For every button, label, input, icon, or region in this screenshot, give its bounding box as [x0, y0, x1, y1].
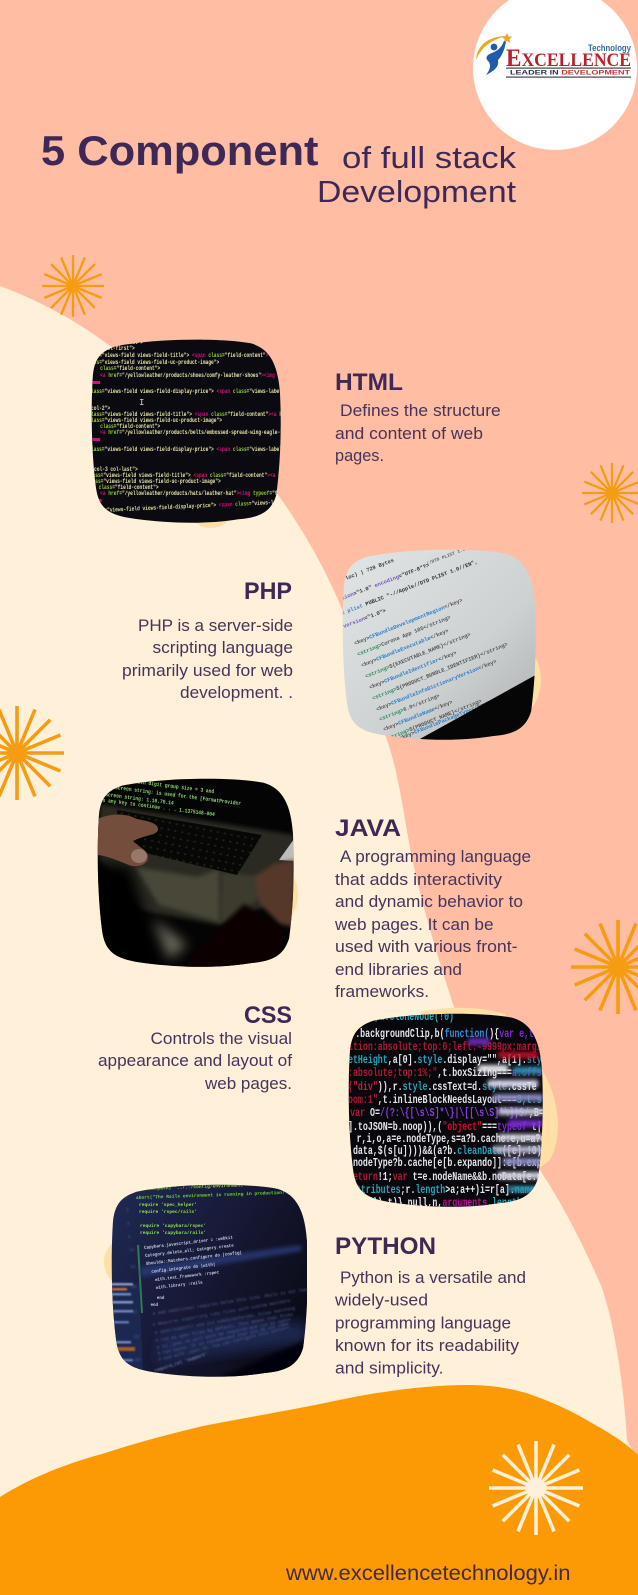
- panel: python photo: 9: [128, 1235, 131, 1240]
- text: html description: [335, 401, 501, 465]
- panel: php photo: <key>CFBundleDevelopmentRegion</key>: [354, 598, 464, 647]
- panel: php photo: <string>6.0</string>: [379, 693, 441, 723]
- panel: php photo: <key>CFBundleInfoDictionaryVersion</key>: [376, 659, 498, 713]
- panel: css photo: oom:1",t.inlineBlockNeedsLayout===3,t.s: [348, 1094, 542, 1108]
- panel: python photo: 28: [135, 1358, 141, 1363]
- text: python description: and simplicity.: [335, 1358, 444, 1378]
- panel: php photo: <string>${PRODUCT_NAME}</string>: [385, 699, 483, 743]
- panel: python photo: Category.delete_all; Category.create: [145, 1243, 234, 1259]
- panel: php photo: <string>Corona App 105</string>: [357, 615, 452, 658]
- panel: php photo: version="1.0">: [343, 608, 387, 630]
- text: php description: primarily used for web: [122, 661, 293, 680]
- panel: python photo: end: [151, 1303, 158, 1308]
- panel: python photo: 25: [134, 1335, 140, 1340]
- panel: python photo: require 'capybara/rspec': [140, 1223, 206, 1229]
- left hand: [97, 814, 158, 866]
- panel: css photo: :absolute;top:1%;",t.boxSizing===a.offsetW: [348, 1067, 557, 1081]
- panel: css photo: .backgroundClip,b(function(){var e,t,n: [355, 1028, 544, 1042]
- heading: css: CSS: [244, 1002, 292, 1029]
- panel: html photo: lass="views-field views-field-display-price"> <span class="views-label views-label": [91, 388, 317, 395]
- panel: java photo: ...with digit group size = 3 and: [126, 778, 214, 795]
- right hand and sleeve: [254, 860, 294, 927]
- panel: python photo: 12: [129, 1248, 135, 1253]
- text: java description: that adds interactivity: [335, 870, 503, 889]
- panel: python photo: # Requires supporting ruby files with custom matchers: [152, 1299, 291, 1328]
- panel: html photo: col-3 col-last">: [94, 466, 138, 473]
- panel: html photo: lass="views-field views-field-title"> <span class="field-content"><a href-field: [91, 411, 307, 418]
- wordmark: EXCELLENCE: [506, 45, 631, 72]
- panel: php photo: <string>${EXECUTABLE_NAME}</string>: [365, 632, 472, 680]
- panel: css photo: etHeight,a[0].style.display="",a[1].style.dis: [348, 1054, 572, 1068]
- panel: python photo: 18: [131, 1285, 137, 1290]
- text: python description: Python is a versatile and: [340, 1268, 526, 1287]
- icon: swoosh and figure: [476, 33, 512, 75]
- panel: html photo: lass="views-field views-field-display-price"> <span class="views-label views-label": [91, 446, 317, 453]
- text: css description: appearance and layout of: [98, 1051, 292, 1070]
- panel: css photo: .data,$(s[u])))&&(a?b.cleanData([e],!0):de: [348, 1145, 557, 1159]
- text: php description: scripting language: [152, 638, 293, 657]
- text: java description: end libraries and: [335, 960, 462, 979]
- heading: python: PYTHON: [335, 1233, 436, 1260]
- text: html description: and content of web: [335, 424, 483, 443]
- panel: php photo: //DTD PLIST 1.0//EN" "http: [426, 535, 495, 567]
- panel: html photo: col-first">: [105, 345, 135, 352]
- text: java description: used with various front-: [335, 937, 518, 956]
- title: [41, 127, 517, 209]
- text: html description: Defines the structure: [340, 401, 501, 420]
- panel: python photo: [104, 1182, 315, 1378]
- text: python description: [334, 1268, 526, 1378]
- text: python description: known for its readability: [335, 1336, 520, 1355]
- panel: python photo: Shoulda::Matchers.configure do |config|: [146, 1251, 242, 1267]
- icon: star right lower: [571, 920, 638, 1014]
- panel: python photo: # Add additional requires below this line. Rails is not loaded: [153, 1286, 315, 1317]
- panel: html photo: <a href="/yellowleather/products/shoes/comfy-leather-shoes"><img typeof: [100, 372, 294, 379]
- text: css description: [98, 1029, 292, 1093]
- panel: python photo: 6: [127, 1222, 130, 1227]
- orange footer wave: [0, 1385, 638, 1595]
- panel: html photo: class="field-content">: [100, 365, 160, 372]
- out-of-focus right edge: [468, 1038, 543, 1192]
- panel: html photo: ass="views-field views-field-title"> <span class="field-content"><a href-field: [93, 472, 305, 479]
- text: python description: programming language: [335, 1314, 511, 1332]
- text: java description: A programming language: [340, 847, 531, 866]
- panel: php photo: <string>${PRODUCT_BUNDLE_IDENTIFIER}</string>: [372, 642, 509, 702]
- panel: css photo: return!1;var t=e.nodeName&&b.noData[e.no: [348, 1171, 547, 1185]
- panel: python photo: 21: [132, 1310, 138, 1315]
- title: of full stack: [342, 140, 517, 175]
- panel: css photo: ].toJSON=b.noop)),("object"===typeof t||n: [348, 1121, 552, 1135]
- panel: css photo: .,u.cloneNode(!0): [370, 1011, 454, 1025]
- panel: python photo: # spec/support/ and its subdirectories. Files matching: [154, 1306, 296, 1336]
- panel: python photo: require 'capybara/rails': [140, 1230, 206, 1236]
- panel: html photo: class="field-content">: [100, 423, 160, 430]
- heading: java: JAVA: [335, 815, 401, 842]
- panel: python photo: # end with _spec.rb. You can configure this pattern: [158, 1325, 290, 1363]
- icon: star footer: [489, 1441, 583, 1535]
- panel: java photo: screen string: 1.10.70.14: [105, 792, 174, 807]
- panel: html photo: class="field-content">: [99, 484, 159, 491]
- panel: python photo: abort("The Rails environment is running in production!"): [136, 1190, 290, 1201]
- panel: css photo: ("div")),r.style.cssText=d.style.cssTe: [348, 1081, 537, 1095]
- panel: php photo: sion="1.0" encoding="UTF-8"?>: [341, 563, 430, 602]
- text: java description: frameworks.: [335, 982, 429, 1001]
- panel: python photo: Capybara.javascript_driver = :webkit: [144, 1235, 233, 1251]
- panel: css photo: .nodeType?b.cache[e[b.expando]]:e[b.exp: [348, 1157, 542, 1171]
- panel: python photo: 3: [126, 1208, 129, 1213]
- panel: html photo: ass="views-field views-field-title"> <span class="field-content"><a href-field: [91, 352, 304, 359]
- panel: python photo: require 'rspec/rails': [139, 1209, 197, 1215]
- panel: php photo: E plist PUBLIC "-//Apple//DTD PLIST 1.0//EN",: [341, 559, 479, 617]
- panel: python photo: require_rel 'support': [154, 1352, 208, 1374]
- text: html description: pages.: [335, 446, 384, 465]
- panel: css photo: ,e,n))),t)},null,n,arguments.length>1: [348, 1197, 532, 1211]
- panel: html photo: col-2">: [91, 405, 110, 412]
- panel: php photo: <key>CFBundleExecutable</key>: [361, 628, 450, 669]
- panel: html photo: <a href="/yellowleather/products/hats/leather-hat"><img typeof="foaf:Image": [100, 490, 305, 497]
- text: java description: [334, 847, 531, 1001]
- text: css description: Controls the visual: [150, 1029, 292, 1048]
- panel: python photo: # run as spec files by default. This means that files: [155, 1312, 294, 1344]
- icon: star right upper: [582, 463, 638, 523]
- text: php description: PHP is a server-side: [138, 616, 293, 635]
- panel: php photo: <key>CFBundlePackageType</key>: [399, 700, 491, 742]
- logo badge: [473, 0, 637, 150]
- panel: php photo: <key>CFBundleName</key>: [383, 699, 454, 733]
- panel: html photo: lass="views-field views-field-uc-product-image">: [91, 417, 222, 424]
- panel: python photo: 1: [125, 1195, 128, 1200]
- panel: html photo: [92, 340, 281, 528]
- panel: python photo: end: [157, 1296, 165, 1301]
- panel: java photo: ess any key to continue . . . 1.1375148-004: [97, 797, 215, 818]
- panel: html photo: s="views-field views-field-display-price"> <span class="views-label": [102, 499, 287, 514]
- panel: html photo: ass="views-field views-field-uc-product-image">: [91, 359, 219, 366]
- panel: css photo: ition:absolute;top:0;left:-9999px;margin-: [348, 1041, 552, 1055]
- text: python description: widely-used: [334, 1290, 428, 1310]
- heading: php: PHP: [244, 578, 292, 605]
- panel: html photo: ass="views-field views-field-uc-product-image">: [93, 478, 221, 485]
- panel: php photo: loc) | 729 Bytes: [345, 558, 395, 582]
- text: java description: web pages. It can be: [334, 915, 494, 934]
- panel: css photo: r,i,o,a=e.nodeType,s=a?b.cache:e,u=a?e: [357, 1133, 545, 1147]
- panel: php photo: [341, 535, 541, 743]
- text: php description: development. .: [180, 683, 293, 702]
- panel: python photo: with.library :rails: [156, 1280, 203, 1291]
- text: php description: [122, 616, 293, 702]
- panel: java photo: screen string: is used for the [FormatProvider: [115, 785, 241, 807]
- text: java description: and dynamic behavior to: [335, 892, 523, 911]
- panel: html photo: <a href="/yellowleather/products/belts/embossed-spread-wing-eagle-belt"><: [100, 429, 299, 436]
- panel: python photo: require 'spec_helper': [139, 1202, 197, 1208]
- panel: python photo: .read_path) "../../config/environment": [141, 1182, 246, 1192]
- panel: php photo: <key>CFBundleIdentifier</key>: [369, 650, 458, 691]
- panel: python photo: # in _spec.rb will both be required and run as specs: [156, 1318, 292, 1351]
- title: Development: [317, 174, 516, 209]
- title: 5 Component: [41, 127, 319, 174]
- panel: python photo: # run twice. It is recommended that you do not name: [157, 1322, 290, 1357]
- icon: star top left: [42, 255, 104, 317]
- panel: html photo: -md-last">: [116, 339, 143, 346]
- website url: www.excellencetechnology.in: [285, 1561, 570, 1585]
- panel: java photo: [97, 777, 298, 972]
- panel: css photo: attributes;r.length>a;a++)i=r[a].name,0: [351, 1184, 545, 1198]
- wordmark: LEADER IN DEVELOPMENT: [510, 70, 631, 76]
- panel: css photo: [348, 1008, 572, 1211]
- text: css description: web pages.: [204, 1074, 292, 1093]
- panel: python photo: with.test_framework :rspec: [155, 1270, 220, 1283]
- heading: html: HTML: [335, 369, 403, 396]
- panel: html photo: I: [139, 398, 144, 408]
- panel: python photo: config.integrate do |with|: [151, 1262, 216, 1275]
- panel: css photo: var O=/(?:\{[\s\S]*\}|\[[\s\S]*\])$/,B=/: [350, 1107, 549, 1121]
- panel: python photo: 15: [130, 1265, 136, 1270]
- icon: star left middle: [0, 706, 64, 800]
